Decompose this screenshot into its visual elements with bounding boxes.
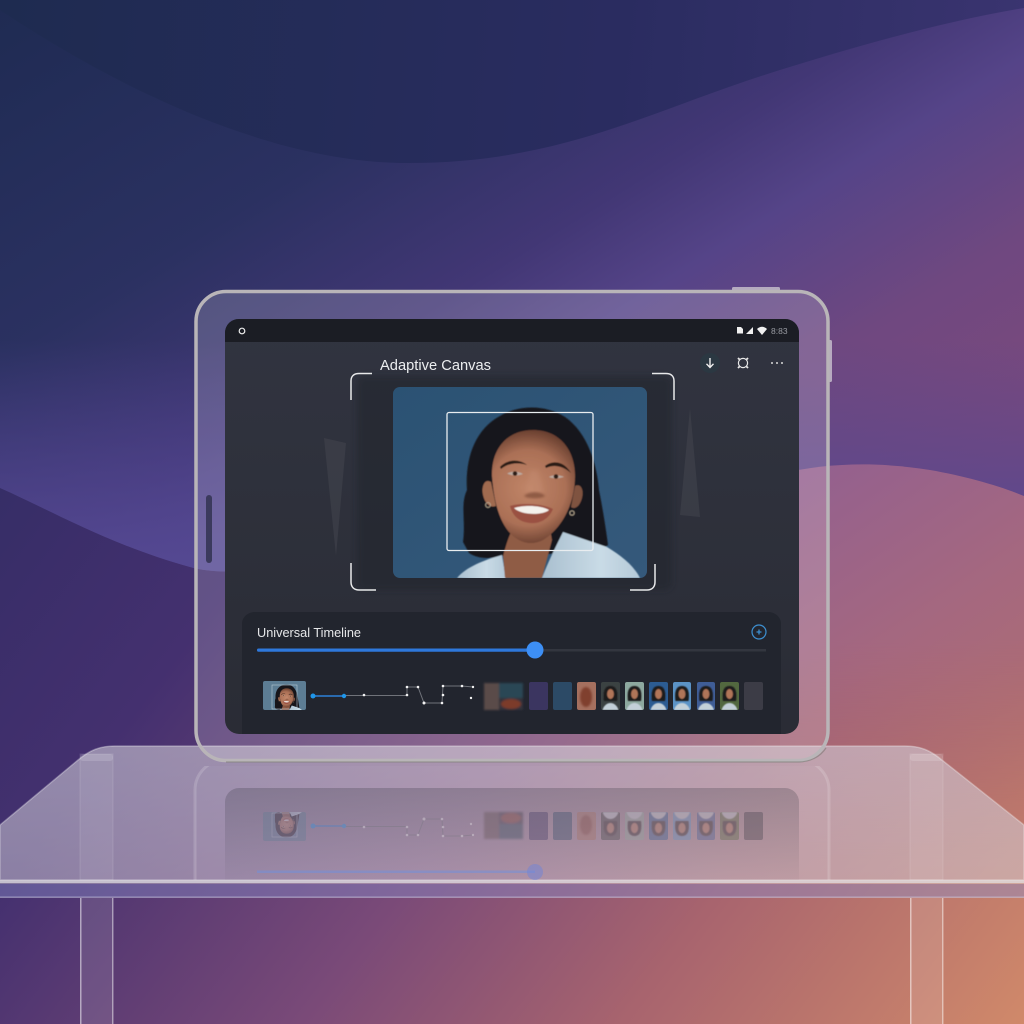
glass table	[0, 746, 1024, 1024]
status icons	[737, 326, 788, 336]
tablet reflection in table	[194, 766, 830, 880]
right wedge shape	[680, 408, 700, 517]
icon: crop circle	[738, 358, 748, 368]
slider progress	[257, 648, 535, 652]
table leg right	[910, 898, 944, 1024]
table back legs seen through glass	[80, 754, 943, 880]
right lower wave	[799, 464, 1024, 730]
left wedge shape	[324, 438, 346, 556]
tablet	[196, 287, 832, 762]
panel: universal timeline	[242, 612, 781, 734]
table leg left	[80, 898, 114, 1024]
table top surface	[0, 746, 1024, 880]
corner brackets	[351, 374, 674, 590]
tablet side button	[828, 340, 832, 382]
middle wave band	[0, 0, 1024, 572]
tablet side slot	[206, 495, 212, 563]
icon: download	[700, 353, 720, 373]
woman portrait	[457, 408, 640, 580]
focus frame	[447, 412, 593, 550]
top dark wave	[0, 0, 1024, 163]
status icon: camera	[239, 328, 245, 334]
tablet top button	[732, 287, 780, 292]
timeline thumbnails and nodes	[263, 681, 763, 714]
icon: add circle	[752, 625, 766, 639]
table front edge	[0, 880, 1024, 898]
title: Adaptive Canvas: Adaptive Canvas	[380, 358, 491, 374]
heading: Universal Timeline: Universal Timeline	[257, 626, 361, 640]
status bar	[225, 319, 799, 342]
status icons: 8:83	[771, 326, 788, 336]
tablet frame	[196, 292, 828, 760]
slider track	[535, 649, 766, 652]
screen	[225, 319, 799, 734]
slider thumb	[526, 642, 544, 658]
canvas backing panel	[357, 376, 672, 590]
icon: more menu	[771, 362, 783, 364]
portrait photo	[393, 387, 647, 580]
tablet bottom edge shadow	[226, 748, 826, 762]
